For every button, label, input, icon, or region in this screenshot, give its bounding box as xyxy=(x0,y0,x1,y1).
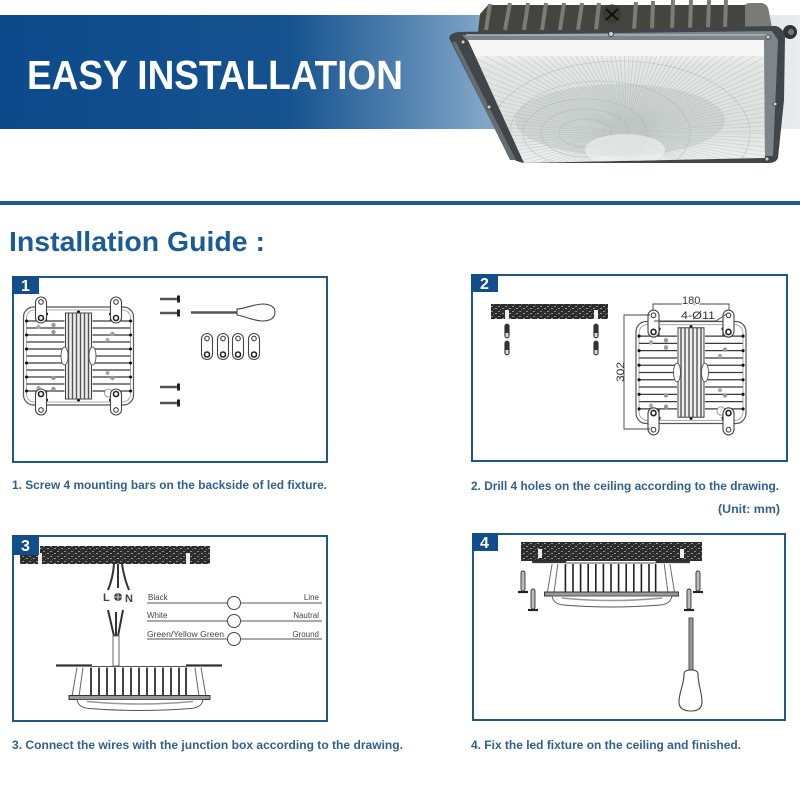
caption 3: 3. Connect the wires with the junction box according to the drawing. xyxy=(12,740,403,752)
screws xyxy=(160,296,180,406)
icon: screwdriver xyxy=(679,618,702,711)
wiring table: Nautral xyxy=(293,611,319,620)
terminals L ground N: L xyxy=(103,592,110,604)
dimensions: 302 xyxy=(615,362,627,382)
ceiling xyxy=(521,542,702,561)
terminals L ground N: N xyxy=(125,593,133,605)
divider xyxy=(0,201,800,205)
fixture wires xyxy=(108,610,123,636)
wiring table: Line xyxy=(304,593,320,602)
caption 2: 2. Drill 4 holes on the ceiling according to the drawing. xyxy=(471,481,779,493)
step number 2 xyxy=(471,274,498,293)
lamp lens xyxy=(468,40,765,163)
caption 1: 1. Screw 4 mounting bars on the backside of led fixture. xyxy=(12,480,327,492)
panel 4: fix fixture xyxy=(472,533,785,720)
step number 3: 3 xyxy=(21,538,30,555)
wall anchors xyxy=(505,324,598,355)
panel 2: drill holes xyxy=(471,274,787,461)
ceiling xyxy=(491,304,608,319)
dimensions: 180 xyxy=(682,295,700,307)
dimensions xyxy=(615,295,729,429)
dimensions: 4-Ø11 xyxy=(681,310,715,322)
screws xyxy=(518,571,703,610)
wiring table: White xyxy=(147,611,168,620)
wiring table: Black xyxy=(148,593,169,602)
step number 4 xyxy=(472,533,498,552)
caption 4: 4. Fix the led fixture on the ceiling and finished. xyxy=(471,740,741,752)
wiring table: Green/Yellow Green xyxy=(147,630,224,639)
spare mounting bars xyxy=(202,334,260,360)
ceiling wires xyxy=(108,564,129,590)
lamp frame xyxy=(449,26,785,163)
banner xyxy=(0,15,800,129)
lamp photo xyxy=(449,0,797,163)
fixture side view xyxy=(56,666,222,710)
step number 1: 1 xyxy=(21,278,30,295)
lamp bolts xyxy=(461,32,777,161)
fixture back view with bars xyxy=(24,297,134,415)
step number 1 xyxy=(12,276,39,295)
step number 3 xyxy=(12,535,39,555)
terminals L ground N xyxy=(103,592,133,605)
unit note: (Unit: mm) xyxy=(718,504,780,516)
banner title: EASY INSTALLATION xyxy=(27,52,403,98)
wiring table: Ground xyxy=(292,630,319,639)
cable xyxy=(113,636,119,666)
icon: screwdriver xyxy=(191,304,275,321)
ceiling xyxy=(20,546,210,564)
fixture drawing xyxy=(636,310,746,435)
panel 1: mounting bars xyxy=(12,276,327,462)
step number 4: 4 xyxy=(480,535,489,552)
step number 2: 2 xyxy=(480,276,489,293)
lamp fins xyxy=(478,0,797,39)
fixture side view xyxy=(532,562,690,607)
wiring table xyxy=(147,593,322,646)
panel 3: wiring xyxy=(12,535,327,721)
section heading: Installation Guide : xyxy=(9,226,265,257)
